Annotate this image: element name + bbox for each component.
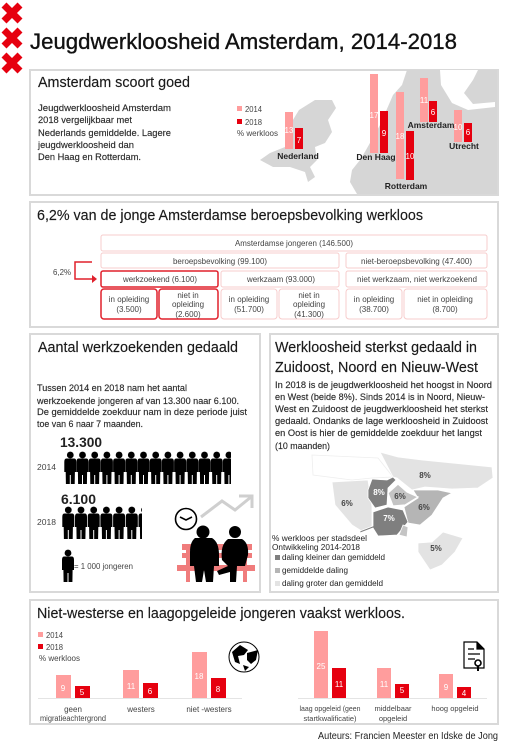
icon: clock (176, 508, 196, 530)
flow boxes: opleiding (293, 300, 325, 309)
bar chart: opleiding: 25 (317, 662, 326, 671)
flow boxes: niet in opleiding (417, 295, 473, 304)
bar chart: opleiding: 11 (335, 680, 344, 689)
text block: (10 maanden) (275, 441, 330, 452)
map legend: daling groter dan gemiddeld (282, 579, 383, 588)
authors: Auteurs: Francien Meester en Idske de Jong (318, 731, 498, 742)
bars: Amsterdam (408, 78, 455, 130)
bar chart: migratieachtergrond: 8 (216, 685, 221, 694)
icon: globe (229, 642, 259, 672)
map legend: daling kleiner dan gemiddeld (282, 553, 385, 562)
bars: Nederland (277, 112, 319, 161)
map legend: Ontwikkeling 2014-2018 (272, 543, 361, 552)
text block: In 2018 is de jeugdwerkloosheid het hoogst in Noord (275, 380, 492, 391)
bar chart: opleiding: middelbaar (374, 704, 412, 713)
heading: Zuidoost, Noord en Nieuw-West (275, 359, 479, 376)
map labels: 5% (430, 544, 442, 553)
heading: Amsterdam scoort goed (38, 74, 190, 91)
icon: diploma (464, 642, 484, 671)
flow boxes: (3.500) (116, 305, 142, 314)
flow boxes: niet-beroepsbevolking (47.400) (361, 257, 472, 266)
icon: Amsterdam crosses (4, 5, 20, 71)
map: stadsdelen (312, 452, 493, 570)
map legend: gemiddelde daling (282, 566, 348, 575)
panel: Aantal werkzoekenden gedaald (30, 334, 260, 592)
flow boxes (101, 235, 487, 319)
panel: Niet-westerse en laagopgeleide (30, 600, 498, 724)
flow boxes: beroepsbevolking (99.100) (173, 257, 267, 266)
bar chart: opleiding: hoog opgeleid (431, 704, 479, 713)
flow boxes: niet werkzaam, niet werkzoekend (357, 275, 477, 284)
bars: Utrecht: Utrecht (449, 141, 479, 151)
legend: 2014 (245, 105, 263, 114)
bars: Den Haag (356, 74, 396, 162)
bar chart: migratieachtergrond (38, 652, 242, 723)
arrow: 6,2%: 6,2% (53, 268, 71, 277)
number 6.100: 6.100 (61, 491, 96, 507)
legend: 2018 (245, 118, 263, 127)
text block: en Oost is hier de gemiddelde zoekduur het langst (275, 428, 482, 439)
text block: en West (beide 8%). Sinds 2014 is in Noord, Nieuw- (275, 392, 485, 403)
text block: 2018 vergelijkbaar met (38, 115, 132, 126)
map labels: 6% (394, 492, 406, 501)
bar chart: migratieachtergrond: 11 (127, 682, 136, 691)
text block: toe van 6 naar 7 maanden. (37, 419, 143, 430)
arrow: trend (201, 496, 252, 517)
legend: 2018 (46, 643, 64, 652)
bars: Den Haag: 17 (370, 111, 379, 120)
icon: two people on bench (190, 526, 248, 582)
pictogram row 2018 (62, 507, 150, 539)
bars: Rotterdam: 18 (396, 132, 405, 141)
bars: Amsterdam: 6 (431, 108, 436, 117)
heading (275, 339, 479, 376)
text block: werkzoekende jongeren af van 13.300 naar 6.100. (36, 396, 239, 407)
text block: jeugdwerkloosheid dan (37, 140, 134, 151)
bar chart: opleiding: laag opgeleid (geen (300, 704, 360, 713)
map labels: 7% (383, 514, 395, 523)
title: Jeugdwerkloosheid Amsterdam, 2014-2018 (30, 29, 457, 54)
legend (38, 631, 80, 663)
text block: gedaald. Ondanks de lage werkloosheid in Zuidoost (275, 416, 488, 427)
bars: Nederland: Nederland (277, 151, 319, 161)
bars: Amsterdam: Amsterdam (408, 120, 455, 130)
heading: 6,2% van de jonge Amsterdamse beroepsbevolking werkloos (37, 207, 423, 224)
bar chart: opleiding: opgeleid (379, 714, 407, 723)
map legend: % werkloos per stadsdeel (272, 534, 367, 543)
bar chart: migratieachtergrond: 18 (195, 672, 204, 681)
map labels: 6% (418, 503, 430, 512)
pictogram legend: = 1 000 jongeren (74, 562, 133, 571)
flow boxes: (41.300) (294, 310, 324, 319)
panel: Werkloosheid per stadsdeel (270, 334, 498, 592)
flow boxes: werkzoekend (6.100) (122, 275, 197, 284)
flow boxes: in opleiding (109, 295, 149, 304)
bars: Nederland: 7 (297, 136, 302, 145)
bars: Rotterdam: Rotterdam (385, 181, 428, 191)
bars: Utrecht (449, 110, 479, 151)
bars: Rotterdam: 10 (406, 152, 415, 161)
year label 2018: 2018 (37, 518, 57, 527)
map labels (341, 471, 442, 553)
bar chart: migratieachtergrond: geen (64, 705, 82, 714)
bars: Amsterdam: 11 (420, 96, 429, 105)
map labels: 6% (341, 499, 353, 508)
text block (37, 103, 171, 163)
flow boxes: (8.700) (432, 305, 458, 314)
pictogram row 2014 (64, 452, 235, 484)
legend: % werkloos (39, 654, 80, 663)
map legend (272, 534, 385, 588)
flow boxes: Amsterdamse jongeren (146.500) (235, 239, 353, 248)
text block (275, 380, 492, 452)
bar chart: migratieachtergrond: 9 (61, 684, 66, 693)
text block (36, 383, 247, 430)
panel: 6,2% beroepsbevolking (30, 202, 498, 327)
heading: Werkloosheid sterkst gedaald in (275, 339, 477, 356)
flow boxes: niet in (177, 291, 199, 300)
bars: Nederland: 13 (285, 126, 294, 135)
bars: Rotterdam (385, 92, 428, 191)
text block: De gemiddelde zoekduur nam in deze periode juist (37, 407, 247, 418)
bars: Den Haag: 9 (382, 129, 387, 138)
bar chart: migratieachtergrond: 5 (80, 688, 85, 697)
text block: Jeugdwerkloosheid Amsterdam (38, 103, 171, 114)
bars: Utrecht: 10 (454, 123, 463, 132)
map: Nederland (260, 100, 336, 182)
legend: % werkloos (237, 129, 278, 138)
bars: Den Haag: Den Haag (356, 152, 396, 162)
flow boxes: in opleiding (229, 295, 269, 304)
map: Randstad background (350, 70, 497, 194)
icon: bench (177, 544, 255, 582)
text block: Tussen 2014 en 2018 nam het aantal (37, 383, 187, 394)
bar chart: opleiding: 4 (462, 689, 467, 698)
map labels: 8% (419, 471, 431, 480)
flow boxes: (2.600) (175, 310, 201, 319)
legend: 2014 (46, 631, 64, 640)
heading: Aantal werkzoekenden gedaald (38, 339, 238, 356)
map labels: 8% (373, 488, 385, 497)
flow boxes: werkzaam (93.000) (246, 275, 315, 284)
panel: Amsterdam scoort goed (30, 70, 498, 195)
pictogram legend (62, 550, 133, 582)
bar chart: migratieachtergrond: niet -westers (186, 705, 232, 714)
arrow: 6,2% (53, 262, 97, 283)
text block: Nederlands gemiddelde. Lagere (38, 128, 171, 139)
legend (237, 105, 278, 138)
text block: Den Haag en Rotterdam. (38, 152, 141, 163)
bar chart: opleiding: 9 (444, 683, 449, 692)
bar chart: migratieachtergrond: 6 (148, 687, 153, 696)
bar chart: migratieachtergrond: westers (126, 705, 155, 714)
bars: Utrecht: 6 (466, 128, 471, 137)
bar chart: opleiding (298, 631, 487, 723)
heading: Niet-westerse en laagopgeleide jongeren vaakst werkloos. (37, 605, 405, 622)
text block: West en Zuidoost de jeugdwerkloosheid het sterkst (275, 404, 488, 415)
flow boxes: (38.700) (359, 305, 389, 314)
bar chart: opleiding: startkwalificatie) (304, 714, 357, 723)
bar chart: opleiding: 11 (380, 680, 389, 689)
bar chart: migratieachtergrond: migratieachtergrond (40, 714, 106, 723)
bar chart: opleiding: 5 (400, 686, 405, 695)
flow boxes: (51.700) (234, 305, 264, 314)
number 13.300: 13.300 (60, 434, 102, 450)
flow boxes: in opleiding (354, 295, 394, 304)
year label 2014: 2014 (37, 463, 57, 472)
flow boxes: opleiding (172, 300, 204, 309)
flow boxes: niet in (298, 291, 320, 300)
